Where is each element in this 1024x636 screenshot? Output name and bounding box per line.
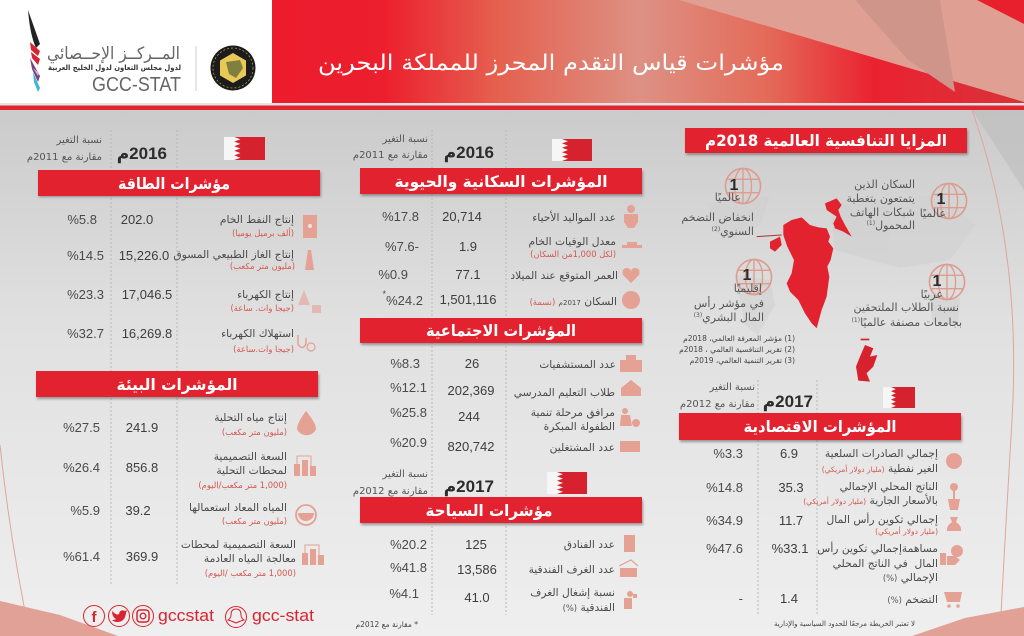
heading bar: tourism: مؤشرات السياحة — [426, 501, 552, 520]
row: occupancy: %4.1 — [389, 586, 419, 601]
row: crude death rate — [385, 235, 642, 259]
row: population: 1,501,116 — [440, 292, 496, 307]
callout: university students: (1) — [852, 317, 860, 324]
row: desalination capacity: لمحطات التحلية — [216, 464, 287, 477]
year header — [353, 469, 587, 497]
heading bar: population — [360, 168, 643, 196]
row: natural gas: (مليون متر مكعب) — [230, 261, 295, 271]
header banner — [272, 0, 1024, 103]
row: natural gas: %14.5 — [67, 248, 104, 263]
row: inflation: 1.4 — [780, 591, 798, 606]
year header — [680, 382, 915, 411]
row: hotels: 125 — [465, 537, 487, 552]
row: desalination capacity — [63, 450, 316, 490]
row: crude oil: 202.0 — [121, 212, 153, 227]
callout: mobile coverage: (1) — [867, 220, 875, 227]
callout: university students: 1 — [933, 273, 942, 290]
row: GDP: الناتج المحلي الإجمالي — [840, 480, 938, 493]
footnotes — [679, 334, 795, 365]
row: GDP: %14.8 — [706, 480, 743, 495]
row: desalinated water: (مليون متر مكعب) — [222, 427, 287, 437]
row: wastewater capacity — [63, 538, 324, 578]
year header: مقارنة مع 2011م — [353, 150, 428, 161]
logo subtitle: لدول مجلس التعاون لدول الخليج العربية — [48, 63, 181, 72]
year header: نسبة التغير — [56, 135, 102, 146]
row: crude oil: (ألف برميل يوميا) — [232, 227, 294, 238]
row: desalination capacity: (1,000 متر مكعب/اليوم) — [198, 480, 287, 490]
row: electricity production: إنتاج الكهرباء — [237, 288, 294, 301]
footnote: * مقارنة مع 2012م — [356, 620, 418, 629]
callout: inflation: (2) — [712, 226, 720, 233]
row: GDP: 35.3 — [778, 480, 804, 495]
row: life expectancy: 77.1 — [455, 267, 481, 282]
row: school students — [390, 380, 641, 399]
world map background — [708, 195, 975, 335]
row: population: السكان 2017م (نسمة) — [530, 295, 617, 308]
row: hotels — [390, 535, 635, 552]
icon: facebook — [84, 606, 104, 626]
callout: inflation: انخفاض التضخم — [681, 211, 754, 224]
year header: 2016م — [444, 143, 494, 162]
year header: 2016م — [117, 144, 167, 163]
row: capital formation — [706, 512, 961, 536]
heading bar: social — [360, 318, 643, 345]
row: capital formation: %34.9 — [706, 513, 743, 528]
row: electricity consumption: 16,269.8 — [122, 326, 172, 341]
callout: human capital: إقليميًا — [734, 282, 762, 295]
row: wastewater capacity: 369.9 — [126, 549, 158, 564]
row: population: %24.2 — [386, 293, 423, 308]
callout: inflation: 1 — [730, 177, 739, 194]
panel: energy indicators — [27, 135, 321, 354]
row: employed — [390, 435, 640, 454]
footnotes: (3) تقرير التنمية العالمي، 2019م — [690, 356, 795, 365]
title: مؤشرات قياس التقدم المحرز للمملكة البحرين — [318, 51, 784, 76]
icon: GCC-STAT ribbon — [28, 10, 40, 92]
year header — [353, 134, 592, 162]
callout: inflation: عالميًا — [715, 191, 741, 204]
row: treated water — [70, 501, 316, 526]
callout: human capital: (3) — [694, 312, 702, 319]
handle: gcc-stat: gcc-stat — [252, 606, 314, 625]
row: early childhood: مرافق مرحلة تنمية — [531, 406, 615, 419]
row: live births: 20,714 — [442, 209, 482, 224]
row: crude oil: %5.8 — [67, 212, 97, 227]
row: desalinated water: %27.5 — [63, 420, 100, 435]
row: occupancy — [389, 586, 637, 614]
callout: university students: عربيًا — [921, 288, 943, 301]
row: hotel rooms: 13,586 — [457, 562, 497, 577]
row: hotels: %20.2 — [390, 537, 427, 552]
row: electricity production — [67, 287, 321, 313]
row: treated water: 39.2 — [125, 503, 151, 518]
row: wastewater capacity: %61.4 — [63, 549, 100, 564]
row: crude death rate: معدل الوفيات الخام — [529, 235, 616, 248]
row: GDP: بالأسعار الجارية (مليار دولار أمريكي) — [803, 493, 938, 507]
callout: university students — [852, 264, 965, 329]
row: wastewater capacity: السعة التصميمية لمحطات — [181, 538, 296, 551]
row: early childhood: الطفولة المبكرة — [544, 420, 615, 433]
row: live births: عدد المواليد الأحياء — [532, 210, 616, 224]
panel: tourism indicators — [353, 469, 643, 629]
row: capital formation share: %33.1 — [772, 541, 808, 556]
heading bar: social: المؤشرات الاجتماعية — [426, 321, 576, 340]
row: crude oil: إنتاج النفط الخام — [220, 213, 294, 226]
row: school students: طلاب التعليم المدرسي — [514, 386, 615, 399]
year header: نسبة التغير — [709, 382, 755, 393]
row: inflation: - — [739, 591, 743, 606]
row: desalination capacity: 856.8 — [126, 460, 158, 475]
row: desalinated water: إنتاج مياه التحلية — [214, 411, 287, 424]
heading bar: energy — [38, 170, 321, 197]
map: small Bahrain inset — [856, 339, 877, 382]
row: electricity production: %23.3 — [67, 287, 104, 302]
row: inflation: التضخم (%) — [887, 593, 938, 606]
row: employed: 820,742 — [448, 439, 494, 454]
row: non-oil exports: %3.3 — [713, 446, 743, 461]
logo text Arabic name: المــركــز الإحــصائي — [47, 44, 180, 64]
row: occupancy: 41.0 — [464, 590, 490, 605]
social media strip — [84, 606, 314, 628]
row: non-oil exports — [713, 446, 962, 475]
handle: gccstat: gccstat — [158, 606, 214, 625]
heading bar: energy: مؤشرات الطاقة — [118, 174, 230, 193]
panel: population and vital indicators — [353, 134, 643, 309]
row: hospitals: عدد المستشفيات — [539, 358, 616, 371]
row: hospitals: %8.3 — [390, 356, 420, 371]
row: electricity production: (جيجا وات. ساعة) — [230, 303, 294, 313]
icon: snapchat — [226, 606, 246, 628]
year header: مقارنة مع 2012م — [353, 486, 428, 497]
heading bar: economic: المؤشرات الاقتصادية — [744, 417, 896, 436]
row: early childhood: 244 — [458, 409, 480, 424]
row: non-oil exports: إجمالي الصادرات السلعية — [825, 447, 938, 460]
icon: twitter — [108, 606, 130, 626]
heading bar: tourism — [360, 497, 643, 525]
callout: human capital: المال البشري — [702, 311, 764, 324]
row: electricity consumption — [67, 326, 315, 354]
callout: mobile coverage: يتمتعون بتغطية — [846, 192, 915, 205]
row: capital formation share: %47.6 — [706, 541, 743, 556]
panel: global competitive advantages — [679, 128, 975, 382]
row: desalination capacity: السعة التصميمية — [214, 450, 287, 463]
logo text GCC-STAT: GCC-STAT — [92, 74, 181, 96]
row: non-oil exports: 6.9 — [780, 446, 798, 461]
row: crude death rate: 1.9 — [459, 239, 477, 254]
row: treated water: (مليون متر مكعب) — [222, 516, 287, 526]
callout: mobile coverage: المحمول — [875, 219, 915, 232]
row: hotel rooms: %41.8 — [390, 560, 427, 575]
row: occupancy: نسبة إشغال الغرف — [530, 586, 615, 599]
heading bar: environment: المؤشرات البيئة — [116, 375, 238, 394]
row: wastewater capacity: معالجة المياه العادمة — [204, 552, 296, 565]
year header: 2017م — [763, 392, 813, 411]
panel: economic indicators — [679, 382, 963, 628]
callout: university students: بجامعات مصنفة عالميًا — [860, 316, 962, 329]
header logo panel — [0, 0, 272, 103]
panel: environment indicators — [36, 371, 324, 578]
heading bar: environment — [36, 371, 319, 399]
row: hotel rooms: عدد الغرف الفندقية — [529, 563, 615, 576]
row: desalinated water — [63, 411, 316, 437]
callout: mobile coverage — [846, 178, 967, 232]
callout: inflation: السنوي — [720, 225, 754, 238]
icon: GCC emblem — [210, 46, 256, 90]
row: treated water: المياه المعاد استعمالها — [189, 501, 287, 514]
row: hotels: عدد الفنادق — [564, 538, 615, 551]
row: crude oil — [67, 212, 317, 238]
row: early childhood — [390, 405, 640, 433]
row: population: * — [382, 289, 386, 299]
icon: instagram — [132, 606, 154, 626]
row: live births: %17.8 — [382, 209, 419, 224]
callout: human capital: 1 — [743, 267, 752, 284]
row: crude death rate: %7.6- — [385, 239, 419, 254]
row: capital formation: (مليار دولار أمريكي) — [875, 526, 938, 536]
heading bar: population: المؤشرات السكانية والحيوية — [394, 172, 608, 191]
heading bar: economic — [679, 413, 962, 442]
callout: mobile coverage: السكان الذين — [854, 178, 915, 191]
callout: mobile coverage: 1 — [937, 191, 946, 208]
callout: mobile coverage: عالميًا — [920, 207, 946, 220]
row: early childhood: %25.8 — [390, 405, 427, 420]
row: capital formation share: الإجمالي (%) — [883, 571, 938, 584]
heading bar: competitive advantages — [685, 128, 968, 155]
callout: inflation — [681, 168, 761, 238]
row: hotel rooms — [390, 560, 638, 577]
heading bar: competitive advantages: المزايا التنافسية العالمية 2018م — [705, 131, 947, 150]
row: desalination capacity: %26.4 — [63, 460, 100, 475]
row: life expectancy — [378, 267, 640, 283]
callout: human capital — [694, 259, 772, 324]
row: population — [382, 289, 640, 309]
row: capital formation: إجمالي تكوين رأس المال — [827, 512, 938, 526]
row: natural gas: إنتاج الغاز الطبيعي المسوق — [173, 248, 294, 261]
row: employed: %20.9 — [390, 435, 427, 450]
year header — [27, 135, 265, 163]
row: treated water: %5.9 — [70, 503, 100, 518]
year header: 2017م — [444, 477, 494, 496]
year header: نسبة التغير — [382, 134, 428, 145]
row: GDP — [706, 480, 960, 510]
row: capital formation share — [706, 541, 963, 584]
row: employed: عدد المشتغلين — [550, 441, 615, 454]
row: crude death rate: (لكل 1,000من السكان) — [530, 249, 616, 259]
row: natural gas: 15,226.0 — [119, 248, 169, 263]
row: electricity production: 17,046.5 — [122, 287, 172, 302]
map disclaimer: لا تعتبر الخريطة مرجعًا للحدود السياسية والإدارية — [774, 620, 915, 628]
year header: مقارنة مع 2012م — [680, 399, 755, 410]
row: life expectancy: العمر المتوقع عند الميلاد — [510, 269, 618, 282]
row: non-oil exports: الغير نفطية (مليار دولار أمريكي) — [822, 462, 938, 475]
footnotes: (1) مؤشر المعرفة العالمي، 2018م — [683, 334, 795, 343]
row: desalinated water: 241.9 — [126, 420, 158, 435]
row: electricity consumption: (جيجا وات.ساعة) — [233, 344, 294, 354]
row: life expectancy: %0.9 — [378, 267, 408, 282]
row: natural gas — [67, 248, 314, 271]
callout: mobile coverage: شبكات الهاتف — [850, 206, 915, 219]
row: capital formation share: المال في الناتج المحلي — [833, 557, 938, 570]
column dividers — [111, 130, 817, 615]
row: wastewater capacity: (1,000 متر مكعب /اليوم) — [205, 568, 296, 578]
callout: university students: نسبة الطلاب الملتحقين — [853, 301, 959, 314]
row: hospitals: 26 — [465, 356, 479, 371]
row: capital formation share: مساهمةإجمالي تكوين رأس — [817, 541, 938, 555]
row: school students: %12.1 — [390, 380, 427, 395]
row: inflation — [739, 591, 962, 608]
year header: مقارنة مع 2011م — [27, 152, 102, 163]
map: Bahrain — [757, 198, 852, 328]
year header: نسبة التغير — [382, 469, 428, 480]
row: occupancy: الفندقية (%) — [563, 601, 615, 614]
callout: human capital: في مؤشر رأس — [694, 296, 764, 310]
row: electricity consumption: استهلاك الكهرباء — [221, 327, 294, 340]
row: school students: 202,369 — [448, 383, 494, 398]
row: capital formation: 11.7 — [779, 513, 803, 528]
row: electricity consumption: %32.7 — [67, 326, 104, 341]
footnotes: (2) تقرير التنافسية العالمي ، 2018م — [679, 345, 795, 354]
icon: facebook: f — [92, 609, 98, 626]
row: live births — [382, 205, 638, 228]
panel: social indicators — [360, 318, 643, 454]
row: hospitals — [390, 355, 642, 372]
